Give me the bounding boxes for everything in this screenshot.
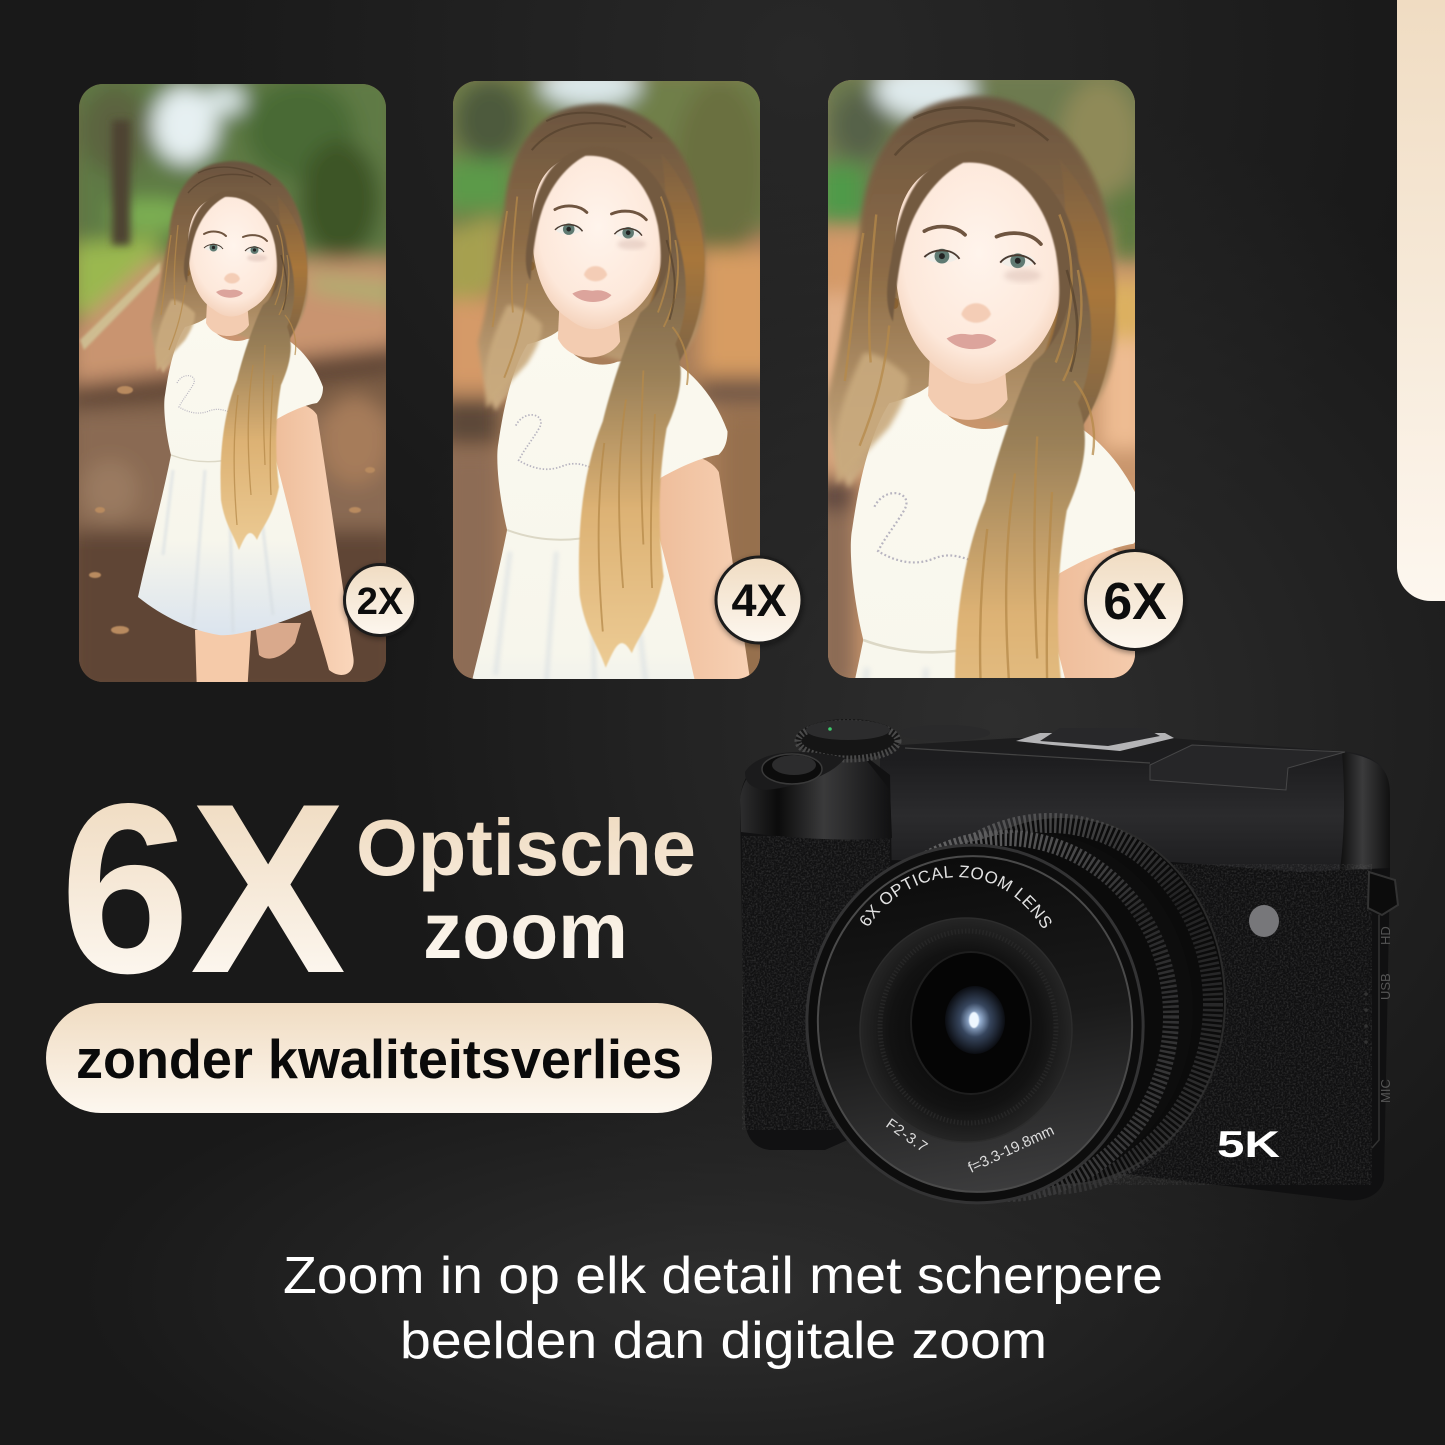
side port door (1372, 915, 1379, 1148)
girl in photo 3 (828, 92, 1135, 678)
shutter-side strap lug (1368, 872, 1398, 915)
girl in photo 2 (472, 100, 750, 679)
side port labels: HD (1378, 926, 1393, 945)
badge: 4X (716, 557, 802, 643)
photo: 2X zoom (79, 84, 386, 682)
front lens ring (789, 828, 1161, 1220)
heading: 6X: 6X (60, 754, 346, 1024)
camera top plate (880, 738, 1390, 880)
5K logo: 5K (1217, 1124, 1280, 1165)
photo: 4X zoom (453, 81, 760, 679)
flash cover (1150, 745, 1345, 790)
grey button (1249, 905, 1279, 937)
badge: 6X (1086, 550, 1184, 650)
lens aperture (911, 952, 1031, 1094)
side port labels: USB (1378, 973, 1393, 1000)
camera grip (740, 752, 892, 1150)
mode dial (796, 719, 900, 759)
heading: Optische zoom (356, 803, 696, 975)
badge: 6X: 6X (1103, 573, 1167, 631)
heading: Optische zoom: Optische (356, 803, 696, 892)
photo: 6X zoom (828, 80, 1135, 678)
speaker dots (1364, 992, 1368, 1044)
lens inner rings (860, 918, 1072, 1142)
pill: zonder kwaliteitsverlies: zonder kwaliteitsverlies (76, 1028, 682, 1090)
camera (740, 719, 1399, 1204)
badge: 2X (344, 564, 416, 636)
knurled ring (839, 838, 1171, 1194)
lens text: focal length: f=3.3-19.8mm (966, 1122, 1057, 1177)
body text (283, 1247, 1163, 1370)
body text: Zoom in op elk detail met scherpere (283, 1247, 1163, 1305)
cream panel edge top right (1397, 0, 1445, 601)
secondary dial (900, 725, 990, 741)
side port labels: MIC (1378, 1079, 1393, 1103)
rear lens barrel (899, 817, 1225, 1185)
badge: 2X: 2X (357, 581, 404, 623)
side port labels (1378, 926, 1393, 1103)
badge: 4X: 4X (731, 575, 787, 626)
body text: beelden dan digitale zoom (400, 1312, 1047, 1370)
heading: Optische zoom: zoom (423, 886, 628, 975)
lens glass (945, 986, 1005, 1054)
lens text: 6X OPTICAL ZOOM LENS (868, 877, 1047, 936)
pill: zonder kwaliteitsverlies (46, 1003, 712, 1113)
camera lower body (800, 860, 1390, 1200)
lens text: F2-3.7: F2-3.7 (883, 1115, 931, 1156)
shutter button (745, 752, 845, 790)
hot shoe (1016, 728, 1174, 751)
girl in photo 1 (138, 161, 354, 695)
camera: 6X OPTICAL ZOOM LENS (860, 865, 1052, 928)
